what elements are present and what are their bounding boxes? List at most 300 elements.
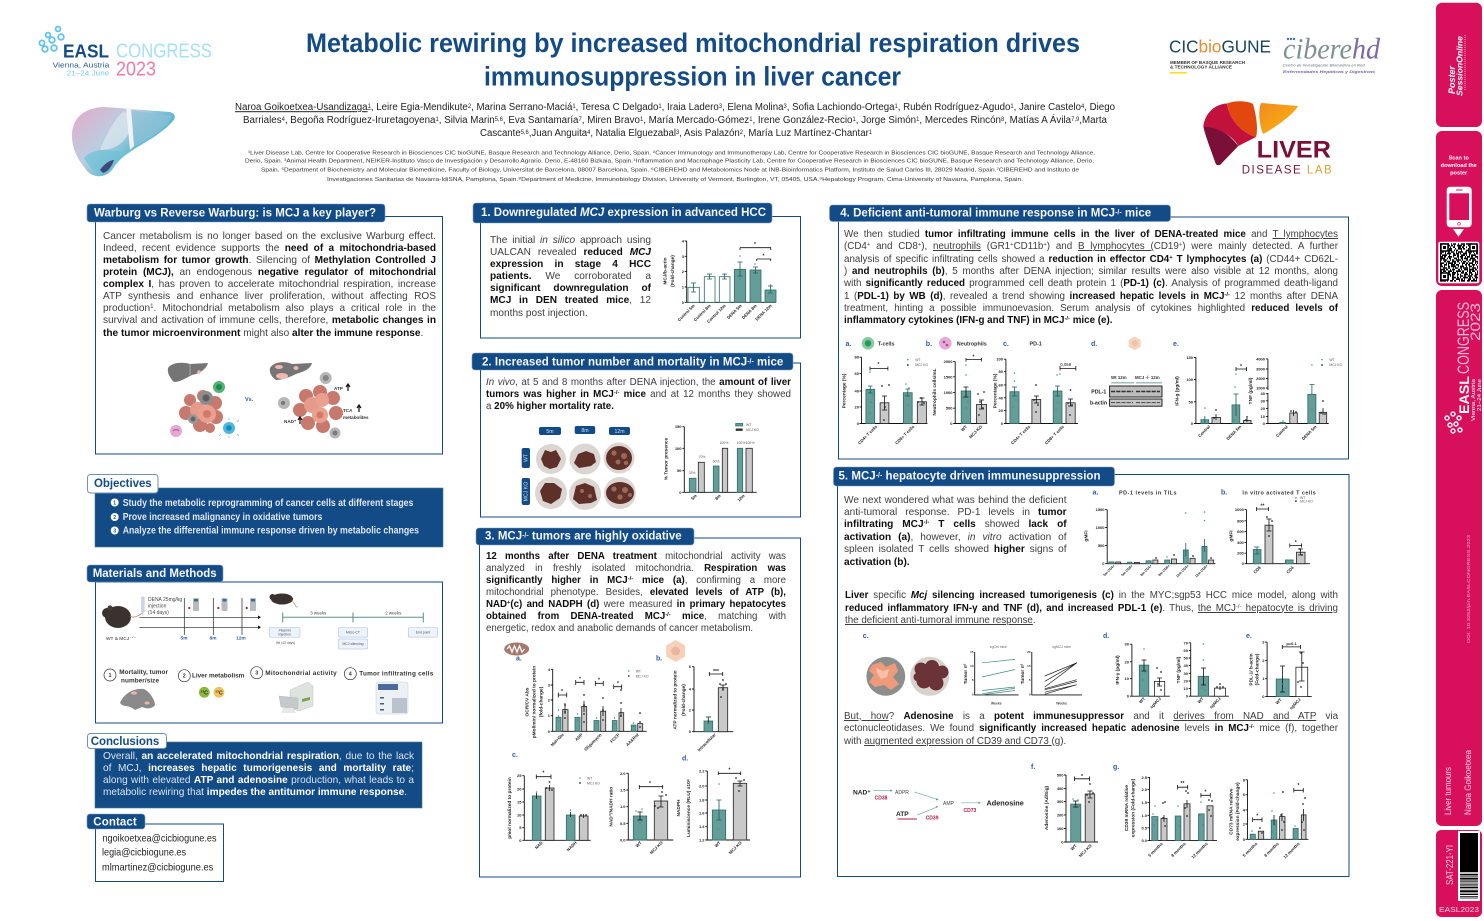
diagram: silencing model timeline: End point: [416, 631, 430, 635]
sidebar: poster code and barcode: [1436, 830, 1482, 917]
sidebar: Poster Session Online badge: SessionOnline: [1454, 36, 1464, 96]
text: conclusions: metabolic rewiring that impedes the antitumor immune response.: [103, 787, 407, 798]
chart c: PD-1: [992, 341, 1078, 445]
chart d: TNF: TNF (pg/ml): [1176, 656, 1182, 683]
image grid: liver tumours at 5, 8 and 12 months: WT: [524, 453, 530, 462]
chart f: adenosine levels: 200: [1057, 812, 1064, 817]
image grid: liver tumours at 5, 8 and 12 months: 5m: [546, 429, 554, 435]
chart e: PDL-1: WT: [1275, 697, 1283, 705]
affiliations: Investigaciones Sanitarias de Navarra-IdiSNA, Pamplona, Spain.⁸Department of Medicine, Immunobiology Division, University of Vermont, Burlington, VT, 05405, USA.⁹Hepatology Program, Cima-University of Navarra, Pamplona, Spain.: [327, 176, 1023, 183]
text: section 5 silencing: the deficient anti-tumoral immune response.: [845, 615, 1036, 626]
chart d: TNF: 10: [1184, 686, 1189, 691]
chart b: ATP normalized to protein: 0: [689, 729, 692, 734]
chart e: IFN-g: 0: [1191, 421, 1194, 426]
chart: % tumor presence: 100: [675, 446, 682, 451]
chart e: TNF: DENA 5m: [1301, 424, 1318, 441]
chart: NAD+/NADH ratio: MCJ KO: [649, 840, 664, 855]
logo: CIC bioGUNE: [1169, 37, 1271, 74]
chart: % tumor presence: 60%: [713, 460, 719, 464]
line chart: sgCtrl mice: 5: [972, 678, 974, 682]
chart b: neutrophils: 1500: [944, 374, 953, 379]
text: section 5 silencing: reduced inflammatory IFN-γ and TNF (d), and increased PDL-1 (e). Thus, the MCJ-/- hepatocyte is driving: [845, 603, 1338, 614]
chart d: NADPH luminescence: MCJ KO: [728, 840, 743, 855]
western blot d: PDL-1 and b-actin: Wt 12m: [1111, 375, 1127, 380]
chart a: OCR normalized to protein: 4: [548, 667, 551, 672]
chart b: neutrophils: [926, 337, 987, 439]
diagram: adenosine pathway: ADPR: [895, 790, 909, 796]
chart b: neutrophils: MCJ-KO: [968, 424, 984, 439]
text: Warburg introduction: protein (MCJ), an endogenous negative regulator of mitochondrial: [103, 267, 436, 278]
panel: Conclusions: [88, 734, 422, 808]
chart b: in vitro activated T cells: *: [1295, 540, 1297, 546]
list: objectives: Study the metabolic reprogramming of cancer cells at different stages: [123, 498, 414, 509]
authors: Naroa Goikoetxea-Usandizaga1, Leire Egia-Mendikute2, Marina Serrano-Maciá1, Teresa C Delgado1, Iraia Ladero3, Elena Molina3, Sofia Lachiondo-Ortega1, Rubén Rodríguez-Agudo1, Janire Castelo4, Diego: [235, 102, 1115, 113]
chart g: CD39 mRNA expression: **: [1181, 781, 1184, 787]
chart d: NADPH luminescence: 1.8: [699, 798, 705, 802]
chart b: neutrophils: Neutrophils cells/mL: [932, 368, 938, 416]
text: section 5 adenosine: ectonucleotidases. We found significantly increased hepatic adenosine levels in MCJ-/- mice (f), together: [844, 723, 1338, 734]
text: section 5 adenosine: But, how? Adenosine is a potent immunesuppressor and it derives from NAD and ATP via: [844, 711, 1338, 722]
step 4: tumor infiltrating cells: 4: [349, 672, 352, 678]
chart e: PDL-1: [1246, 633, 1312, 710]
diagram: DENA injection timeline: 5m: [181, 636, 187, 642]
diagram: adenosine pathway: Adenosine: [986, 798, 1024, 808]
text: section 5 intro: We next wondered what was behind the deficient: [844, 495, 1067, 506]
text: section 4: ) and neutrophils (b), 5 months after DENA injection; similar results were also visible at 12 months, along: [844, 266, 1338, 277]
chart a: T-cells percentage: a.: [846, 341, 851, 348]
chart b: ATP normalized to protein: 4: [689, 686, 692, 692]
line chart: sgMCJ mice: 5: [1029, 678, 1031, 682]
diagram: adenosine pathway: CD38: [875, 795, 888, 801]
chart c: PD-1: PD-1: [1030, 342, 1042, 348]
diagram: silencing model timeline: [269, 594, 438, 649]
line chart: sgCtrl mice: Tumor nº: [963, 663, 969, 684]
chart d: NADPH luminescence: NADPH: [676, 799, 682, 817]
list: objectives: Analyze the differential immune response driven by metabolic changes: [123, 526, 419, 536]
logo: CIBERehd: Centro de Investigación Biomédica en Red: [1283, 64, 1365, 68]
line chart: sgMCJ mice: 0: [1029, 692, 1031, 696]
text: section 4: analysis of specific infiltrating cells showed a reduction in effector CD4+ T lymphocytes (a) (CD44+ CD62L-: [844, 254, 1338, 265]
chart b: in vitro activated T cells: 400: [1237, 540, 1245, 545]
chart b: ATP normalized to protein: b.: [656, 656, 662, 662]
chart g: CD39 mRNA expression: 2.0: [1141, 787, 1148, 792]
step 4: tumor infiltrating cells: [344, 668, 434, 714]
chart e: TNF: 3000: [1256, 366, 1266, 372]
chart b: in vitro activated T cells: [1221, 490, 1316, 575]
chart f: adenosine levels: f.: [1031, 764, 1035, 771]
chart d: IFN-gamma: sgMCJ: [1149, 696, 1162, 709]
text: Warburg introduction: survival and activation of immune cells, therefore, metabolic changes in: [103, 315, 436, 326]
chart g: CD73 mRNA expression: 0: [1243, 837, 1246, 842]
chart: % tumor presence: 33%: [689, 471, 695, 475]
text: Warburg introduction: Indeed, recent evidence supports the need of a mitochondria-based: [103, 243, 436, 254]
chart c: PD-1: 40: [999, 395, 1004, 400]
chart d: NADPH luminescence: 1.4: [699, 824, 705, 829]
text: section 5 intro: activation (a), however, in vitro activation of: [844, 532, 1067, 543]
chart g: CD73 mRNA expression: 12 months: [1282, 841, 1301, 860]
diagram: DENA injection timeline: 8m: [210, 636, 216, 642]
chart d: IFN-gamma: 10: [1125, 676, 1130, 681]
chart c: pmol NAD and NADH: pmol normalized to protein: [507, 777, 513, 839]
text: Warburg introduction: production1. Mitochondrial metabolism also plays a critical role in the: [103, 303, 436, 314]
chart d: NADPH luminescence: 1.6: [699, 810, 705, 816]
chart c: pmol NAD and NADH: WT: [587, 776, 592, 780]
chart g: CD73 mRNA expression: 4: [1243, 807, 1246, 812]
authors: Barriales4, Begoña Rodríguez-Iruretagoyena1, Silvia Marin5,6, Eva Santamaría7, Miren Bravo1, María Mercado-Gómez1, Irene González-Recio1, Jorge Simón1, Mercedes Rincón8, Matías A Ávila7,9,Marta: [243, 113, 1107, 126]
chart a: OCR normalized to protein: WT: [636, 670, 641, 674]
chart e: PDL-1: sgMCJ: [1288, 697, 1302, 710]
text: section 5 silencing: [845, 590, 1338, 628]
text: section 2: tumors was higher in MCJ-/- mice and at 12 months they showed: [486, 389, 791, 400]
chart d: NADPH luminescence: WT: [714, 840, 722, 848]
chart a: OCR normalized to protein: FCCP: [609, 732, 621, 744]
chart d: TNF: WT: [1197, 696, 1205, 704]
line chart: sgMCJ mice: sgMCJ mice: [1052, 645, 1071, 649]
chart a: PD-1 levels in TILs: 5m CD4+: [1103, 564, 1116, 577]
chart: MCJ/b-actin fold change: Control 5m: [677, 303, 696, 322]
chart: % tumor presence: [664, 423, 759, 503]
diagram: DENA injection timeline: DENA 25mg/kg: [148, 597, 182, 603]
chart c: pmol NAD and NADH: [507, 752, 600, 852]
text: Warburg introduction: ATP synthesis and enhance liver proliferation, without affecting ROS: [103, 291, 436, 302]
illustration: Warburg tumour microenvironment: NAD⁺: [284, 419, 297, 424]
panel: Materials and Methods: [87, 565, 442, 723]
text: section 2: [486, 377, 791, 417]
chart: NAD+/NADH ratio: 1.5: [620, 788, 626, 792]
text: conclusions: of MCJ, increases hepatic tumorigenesis and mortality rate;: [103, 763, 414, 774]
text: section 3: NAD+(c) and NADPH (d) were measured in primary hepatocytes: [486, 599, 786, 610]
chart: MCJ/b-actin fold change: Control 12m: [706, 303, 727, 324]
line chart: sgMCJ mice: 20: [1027, 650, 1031, 654]
chart d: TNF: 40: [1184, 663, 1189, 668]
chart: % tumor presence: 100%: [737, 441, 745, 445]
chart g: CD73 mRNA expression: *: [1298, 783, 1300, 789]
chart a: T-cells percentage: 20: [855, 404, 860, 409]
chart c: pmol NAD and NADH: 25: [517, 773, 522, 778]
chart b: in vitro activated T cells: 600: [1237, 529, 1245, 534]
text: section 5 adenosine: with augmented expression of CD39 and CD73 (g).: [844, 736, 1066, 747]
chart a: OCR normalized to protein: AA&Rot: [625, 732, 640, 747]
text: section 5 intro: [844, 495, 1067, 571]
chart b: neutrophils: *: [973, 354, 975, 360]
chart d: TNF: 70: [1184, 640, 1189, 645]
chart d: IFN-gamma: 0: [1127, 694, 1130, 699]
logo: Liver Disease Lab: LIVER: [1257, 136, 1331, 163]
chart a: OCR normalized to protein: 2: [548, 698, 551, 702]
text: section 1: months post injection.: [490, 308, 588, 319]
chart d: IFN-gamma: d.: [1103, 633, 1109, 640]
logo: CIBERehd: ciberehd: [1283, 32, 1381, 65]
diagram: adenosine pathway: ATP: [896, 811, 909, 818]
chart b: ATP normalized to protein: Intracellular: [696, 732, 717, 753]
text: section 4: [844, 229, 1338, 329]
chart d: TNF: 0: [1186, 694, 1189, 699]
title: [306, 28, 1080, 92]
sidebar: Poster Session Online badge: Poster: [1447, 65, 1457, 94]
chart b: ATP normalized to protein: 2: [689, 708, 692, 712]
chart: % tumor presence: WT: [746, 423, 751, 427]
chart: NAD+/NADH ratio: 1.0: [620, 804, 626, 809]
chart g: CD39 mRNA expression: 12 months: [1190, 841, 1209, 860]
chart b: neutrophils: b.: [926, 341, 932, 348]
chart a: PD-1 levels in TILs: 5m CD8+: [1121, 564, 1134, 577]
chart c: PD-1: 20: [999, 408, 1004, 413]
chart a: OCR normalized to protein: [504, 642, 649, 752]
heading: section 1: 1. Downregulated MCJ expression in advanced HCC: [481, 207, 766, 219]
chart f: adenosine levels: *: [1081, 774, 1083, 780]
logo: EASL Congress 2023: Vienna, Austria: [53, 60, 110, 70]
chart: % tumor presence: 8m: [714, 493, 722, 501]
panel 3: tumors are highly oxidative: [476, 528, 800, 877]
chart b: ATP normalized to protein: ATP normalized to protein: [673, 670, 679, 730]
chart a: PD-1 levels in TILs: 12m CD4+: [1175, 564, 1190, 578]
illustration: Warburg tumour microenvironment: TCA: [343, 408, 353, 413]
text: section 3: mitochondrial phenotype. Besides, elevated levels of ATP (b),: [486, 587, 786, 598]
diagram: adenosine pathway: NAD⁺: [853, 790, 871, 796]
chart c: pmol NAD and NADH: 20: [517, 786, 522, 792]
chart a: T-cells percentage: CD4+ T cells: [857, 424, 879, 445]
chart a: OCR normalized to protein: 1: [548, 713, 551, 718]
chart b: ATP normalized to protein: ***: [713, 669, 719, 675]
text: contact emails: mlmartinez@cicbiogune.es: [102, 862, 213, 874]
chart g: CD39 mRNA expression: *: [1205, 790, 1207, 796]
panel 4: Deficient anti-tumoral immune response: [830, 205, 1348, 459]
title: immunosuppression in liver cancer: [484, 62, 901, 92]
heading: Materials and Methods: Materials and Methods: [93, 568, 217, 580]
chart: % tumor presence: 5m: [690, 493, 698, 501]
diagram: DENA injection timeline: injection: [148, 604, 167, 610]
sidebar logo: EASL Congress 2023: EASL: [1456, 376, 1472, 414]
chart b: in vitro activated T cells: 1000: [1235, 507, 1245, 512]
image grid: liver tumours at 5, 8 and 12 months: MCJ KO: [524, 482, 530, 501]
illustration: Warburg tumour microenvironment: metabolites: [343, 415, 369, 420]
chart g: CD73 mRNA expression: [1228, 777, 1308, 860]
line chart: sgMCJ mice: Weeks: [1056, 702, 1067, 706]
image grid: liver tumours at 5, 8 and 12 months: 12m: [614, 429, 625, 435]
chart a: OCR normalized to protein: pMol/min/ normalized to protein: [532, 666, 538, 738]
sidebar: scan to download the poster: [1436, 131, 1482, 286]
chart e: IFN-g: e.: [1173, 341, 1179, 348]
chart a: OCR normalized to protein: *: [579, 676, 581, 682]
text: section 5 silencing: Liver specific Mcj silencing increased tumorigenesis (c) in the MYC;sgp53 HCC mice model, along with: [845, 590, 1338, 601]
text: section 1: [490, 235, 651, 325]
text: Warburg introduction: Cancer metabolism is no longer based on the exclusive Warburg effect.: [103, 231, 436, 242]
text: section 3: energetic, redox and anabolic demands of cancer metabolism.: [486, 623, 753, 634]
chart g: CD39 mRNA expression: 0.5: [1141, 825, 1148, 830]
chart b: neutrophils: WT: [960, 424, 968, 432]
chart: % tumor presence: 12m: [736, 493, 746, 503]
western blot d: PDL-1 and b-actin: d.: [1091, 341, 1097, 348]
chart e: TNF: 2000: [1256, 376, 1266, 381]
text: section 1: expression in stage 4 HCC: [490, 259, 651, 270]
text: section 1: UALCAN revealed reduced MCJ: [490, 247, 651, 258]
chart d: IFN-gamma: WT: [1138, 696, 1146, 704]
sidebar: DOI: DOI: 10.3252/pin.EASLCONGRESS.2023: [1466, 534, 1471, 643]
chart b: in vitro activated T cells: b.: [1221, 490, 1227, 496]
chart: MCJ/b-actin fold change: *: [754, 242, 756, 248]
sidebar: Poster Session Online badge: [1436, 3, 1482, 127]
panel: Warburg vs Reverse Warburg: [87, 204, 442, 454]
chart a: PD-1 levels in TILs: 8m CD4+: [1140, 564, 1153, 577]
chart c: pmol NAD and NADH: c.: [512, 752, 518, 759]
chart e: TNF: 0: [1263, 421, 1266, 426]
chart e: TNF: 20: [1261, 406, 1266, 411]
chart e: TNF: 40: [1261, 391, 1266, 396]
panel: Objectives: [88, 474, 443, 547]
chart: MCJ/b-actin fold change: DENA 12m: [754, 303, 773, 322]
western blot d: PDL-1 and b-actin: PDL-1: [1091, 390, 1106, 396]
heading: Contact: Contact: [93, 816, 137, 828]
text: contact emails: legia@cicbiogune.es: [102, 846, 186, 858]
chart: MCJ/b-actin fold change: 1: [682, 284, 685, 290]
chart: % tumor presence: % Tumor presence: [664, 437, 670, 480]
chart a: PD-1 levels in TILs: a.: [1092, 490, 1098, 496]
logo: CIC bioGUNE: & TECHNOLOGY ALLIANCE: [1170, 65, 1232, 70]
chart g: CD73 mRNA expression: expression (Fold-change): [1235, 782, 1241, 841]
list: objectives: 2: [113, 515, 116, 521]
chart e: IFN-g: IFN-g (pg/ml): [1174, 376, 1180, 406]
diagram: silencing model timeline: Micro-CT: [346, 631, 360, 635]
chart e: TNF: [1248, 356, 1343, 441]
logo: EASL Congress 2023: 2023: [116, 58, 156, 80]
logo: EASL Congress 2023: [39, 27, 212, 81]
step 3: mitochondrial activity: 3: [255, 671, 258, 677]
affiliations: ¹Liver Disease Lab, Centre for Cooperative Research in Biosciences CIC bioGUNE, Basque Research and Technology Alliance, Derio, Spain. ²Cancer Immunology and Immunotherapy Lab, Centre for Cooperative Research in Biosciences CIC bioGUNE, Basque Research and Technology Alliance,: [248, 151, 1095, 157]
chart g: CD39 mRNA expression: 1.0: [1141, 813, 1148, 818]
step 1: mortality, tumor number/size: Mortality, tumor: [119, 669, 168, 676]
sidebar: EASL Congress band: [1436, 290, 1483, 826]
heading: Objectives: Objectives: [94, 478, 152, 490]
chart f: adenosine levels: [1031, 764, 1098, 858]
logo: EASL Congress 2023: CONGRESS: [116, 40, 212, 62]
chart d: IFN-gamma: 20: [1125, 659, 1130, 664]
illustration: Warburg tumour microenvironment: Vs.: [245, 397, 254, 403]
text: Warburg introduction: the tumor microenvironment might also alter the immune response.: [103, 328, 423, 339]
panel 2: Increased tumor number and mortality: [472, 353, 800, 517]
chart g: CD73 mRNA expression: CD73 mRNA relative: [1228, 788, 1234, 835]
chart d: TNF: 30: [1184, 671, 1189, 676]
chart e: PDL-1: 3: [1262, 640, 1265, 645]
text: Warburg introduction: metabolism for tumor growth. Silencing of Methylation Controlled J: [103, 255, 436, 266]
panel 5: hepatocyte driven immunesuppression: [834, 467, 1349, 876]
sidebar: poster code and barcode: EASL2023: [1439, 905, 1479, 914]
chart: NAD+/NADH ratio: [608, 771, 673, 855]
text: conclusions: [103, 751, 414, 801]
line chart: sgCtrl mice: [963, 645, 1019, 706]
chart e: TNF: 1000: [1256, 386, 1266, 390]
text: section 1: MCJ in DEN treated mice, 12: [490, 295, 651, 306]
chart g: CD39 mRNA expression: expression (Fold-change): [1130, 778, 1136, 837]
text: section 4: with significantly reduced programmed cell death protein 1 (PD-1) (c). Analysis of programmed death-ligand: [844, 278, 1338, 289]
chart b: in vitro activated T cells: In vitro activated T cells: [1242, 491, 1316, 497]
chart b: in vitro activated T cells: 200: [1237, 551, 1245, 556]
diagram: silencing model timeline: injection: [278, 633, 291, 637]
chart: NAD+/NADH ratio: NAD⁺/NADH ratio: [608, 787, 614, 827]
chart c: PD-1: 0: [1001, 421, 1004, 426]
chart a: OCR normalized to protein: *: [617, 681, 619, 687]
chart a: PD-1 levels in TILs: 12m CD8+: [1194, 564, 1209, 578]
chart a: OCR normalized to protein: Mal+Glu: [550, 732, 565, 747]
chart: MCJ/b-actin fold change: 2: [682, 269, 685, 274]
text: section 4: inflammatory cytokines (IFN-g and TNF) in MCJ-/- mice (e).: [844, 315, 1112, 326]
chart g: CD39 mRNA expression: 2.5: [1141, 775, 1148, 780]
logo: Liver Disease Lab: [1203, 101, 1332, 176]
chart c: pmol NAD and NADH: *: [543, 770, 545, 776]
chart a: T-cells percentage: 60: [855, 371, 860, 376]
step 1: mortality, tumor number/size: number/size: [121, 678, 159, 685]
image grid: liver tumours at 5, 8 and 12 months: [522, 426, 636, 510]
caption: scan to download: poster: [1450, 170, 1468, 176]
chart g: CD39 mRNA expression: 8 months: [1170, 841, 1187, 858]
chart a: OCR normalized to protein: Oligomycin: [583, 732, 603, 752]
chart a: PD-1 levels in TILs: 1000: [1096, 525, 1105, 530]
chart a: OCR normalized to protein: OCR/CV Abs: [524, 687, 530, 716]
chart e: PDL-1: PDL-1/ b-actin: [1249, 653, 1255, 686]
panel 1: Downregulated MCJ expression: [473, 203, 800, 338]
chart a: OCR normalized to protein: *: [598, 678, 600, 684]
icon: stylised liver illustration: [72, 107, 175, 176]
chart f: adenosine levels: 400: [1057, 786, 1064, 791]
chart g: CD73 mRNA expression: 6: [1243, 792, 1246, 797]
heading: section 4: 4. Deficient anti-tumoral immune response in MCJ-/- mice: [840, 207, 1151, 219]
chart: MCJ/b-actin fold change: 3: [682, 254, 685, 259]
step 1: mortality, tumor number/size: [104, 669, 168, 710]
chart b: neutrophils: 500: [946, 406, 953, 411]
sidebar logo: EASL Congress 2023: 2023: [1467, 303, 1483, 341]
chart g: CD39 mRNA expression: 5 months: [1147, 841, 1164, 858]
text: section 4: (CD4+ and CD8+), neutrophils (GR1+CD11b+) and B lymphocytes (CD19+) were mainly detected. A further: [844, 241, 1338, 252]
text: section 4: We then studied tumor infiltrating immune cells in the liver of DENA-treated mice and T lymphocytes: [844, 229, 1338, 240]
chart a: PD-1 levels in TILs: 8m CD8+: [1158, 564, 1171, 577]
images c: liver tumours in sgCtrl and sgMCJ: [863, 633, 949, 696]
list: objectives: 1: [113, 500, 116, 506]
chart: NAD+/NADH ratio: WT: [635, 840, 643, 848]
chart d: NADPH luminescence: 2.2: [699, 768, 705, 774]
diagram: adenosine pathway: [853, 789, 1024, 821]
chart e: IFN-g: Control: [1197, 424, 1211, 438]
chart e: TNF: 4000: [1256, 356, 1266, 361]
sidebar logo: EASL Congress 2023: 21–24 June: [1477, 379, 1483, 411]
text: section 1: The initial in silico approach using: [490, 235, 651, 246]
chart: MCJ/b-actin fold change: 0: [682, 300, 685, 305]
chart f: adenosine levels: WT: [1070, 843, 1078, 851]
logo: CIC bioGUNE: MEMBER OF BASQUE RESEARCH: [1170, 60, 1245, 65]
step 1: mortality, tumor number/size: 1: [108, 673, 112, 679]
chart: MCJ/b-actin fold change: *: [763, 254, 765, 260]
chart b: neutrophils: Neutrophils: [957, 341, 987, 347]
chart g: CD73 mRNA expression: *: [1256, 814, 1258, 820]
chart a: PD-1 levels in TILs: 0: [1102, 561, 1105, 566]
sidebar logo: EASL Congress 2023: Vienna, Austria: [1471, 378, 1477, 421]
chart g: CD39 mRNA expression: [1113, 764, 1217, 860]
QR code: [1438, 242, 1479, 283]
chart f: adenosine levels: MCJ KO: [1078, 843, 1093, 858]
logo: Liver Disease Lab: DISEASE LAB: [1242, 164, 1332, 176]
affiliations: [245, 151, 1095, 183]
western blot d: PDL-1 and b-actin: [1090, 336, 1162, 406]
chart a: PD-1 levels in TILs: PD-1 levels in TILs: [1119, 491, 1176, 497]
text: section 4: treatment, hinting a possible immunoevasion. Serum analysis of cytokines highlighted reduced levels of: [844, 303, 1338, 314]
step 2: liver metabolism: Liver metabolism: [192, 672, 245, 680]
list: objectives: Prove increased malignancy in oxidative tumors: [123, 512, 323, 523]
chart c: PD-1: CD4+ T cells: [1010, 424, 1032, 445]
text: section 5 adenosine: [844, 711, 1338, 749]
sidebar: presenter: Naroa Goikoetxea: [1462, 749, 1473, 815]
chart d: NADPH luminescence: [676, 756, 750, 855]
chart f: adenosine levels: 0: [1061, 840, 1064, 844]
chart d: TNF: 50: [1184, 656, 1189, 660]
chart d: TNF: 60: [1184, 648, 1189, 653]
